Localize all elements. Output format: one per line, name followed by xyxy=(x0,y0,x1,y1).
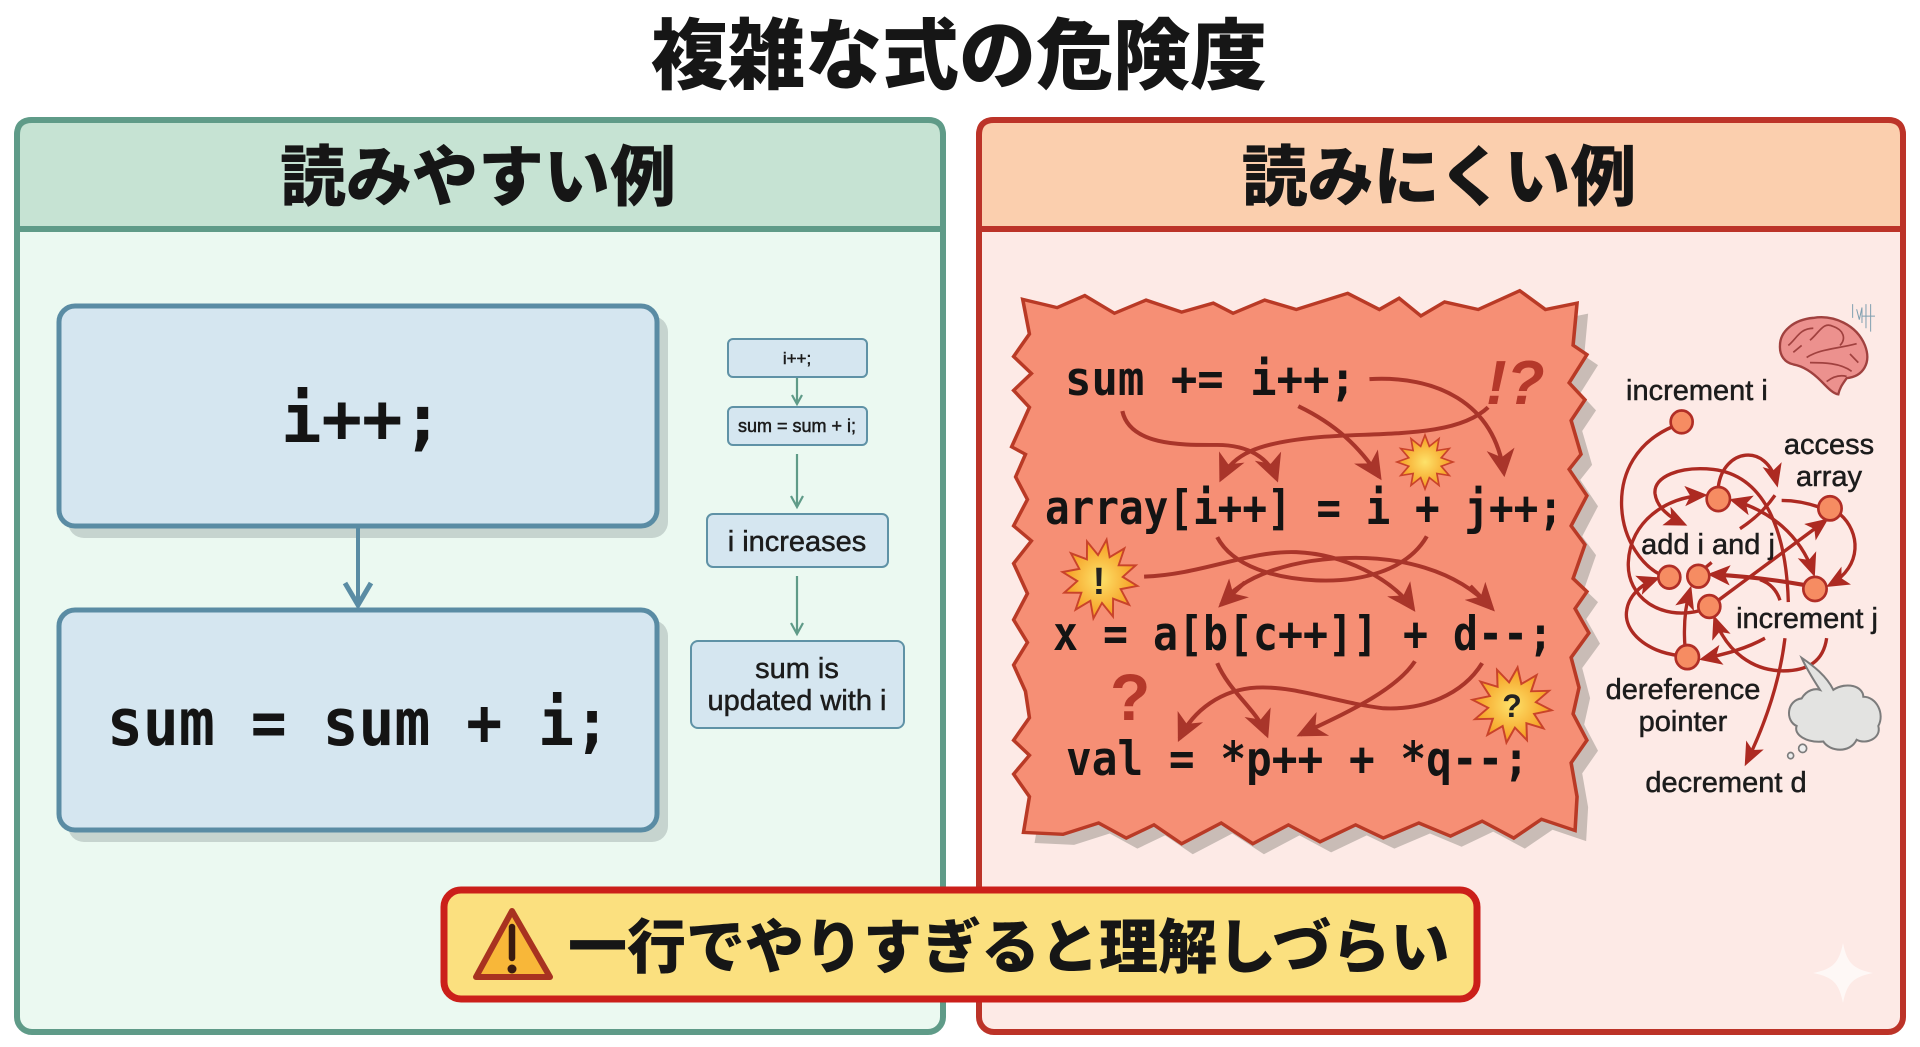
jagged code block xyxy=(1012,291,1600,854)
panel header xyxy=(979,120,1903,229)
icon: burst question: ? xyxy=(1502,688,1522,724)
small box: i increases: i increases xyxy=(728,526,866,558)
small box: sum = sum + i: sum = sum + i; xyxy=(738,416,856,436)
icon: burst exclamation xyxy=(1056,533,1144,625)
icon: burst exclamation: ! xyxy=(1093,561,1105,603)
warning banner xyxy=(444,890,1477,999)
small box: i++ xyxy=(728,339,867,377)
small arrow 2 xyxy=(791,454,803,507)
small flow diagram xyxy=(691,339,904,728)
panel: hard-to-read example xyxy=(979,120,1903,1032)
label: access array xyxy=(1784,429,1874,493)
code line 1: sum += i++; xyxy=(1065,352,1356,407)
code box: i++ xyxy=(59,306,668,538)
icon: brain xyxy=(1780,304,1875,394)
code box: sum xyxy=(59,610,668,842)
label: add i and j: add i and j xyxy=(1641,529,1775,561)
small arrow 1 xyxy=(792,378,802,404)
arrow: big flow xyxy=(345,527,371,605)
decorative sparkle xyxy=(1813,943,1873,1003)
diagram nodes xyxy=(1658,411,1842,669)
code line 4: val = *p++ + *q--; xyxy=(1066,732,1529,787)
diagram arrows xyxy=(1622,426,1855,762)
icon: burst small xyxy=(1397,435,1453,489)
small box: i++: i++; xyxy=(783,349,811,368)
banner text: 一行でやりすぎると理解しづらい xyxy=(568,915,1449,981)
label: dereference pointer: dereference xyxy=(1606,674,1760,706)
code box: i++: i++; xyxy=(281,380,443,459)
label: dereference pointer xyxy=(1606,674,1760,738)
small box: sum is updated with i: updated with i xyxy=(708,685,886,717)
title: 複雑な式の危険度 xyxy=(651,14,1267,100)
label: increment i: increment i xyxy=(1626,375,1768,407)
code line 3: x = a[b[c++]] + d--; xyxy=(1053,607,1553,662)
label: access array: array xyxy=(1796,461,1863,493)
tangled thought diagram xyxy=(1606,304,1881,799)
panel header xyxy=(17,120,943,229)
small box: i increases xyxy=(707,514,888,567)
icon: burst question xyxy=(1467,662,1557,748)
panel header: 読みやすい例 xyxy=(280,140,676,214)
jagged paper xyxy=(1012,291,1600,854)
small box: sum is updated with i: sum is xyxy=(755,653,839,685)
panel background xyxy=(17,120,943,1032)
small box: sum is updated with i xyxy=(691,641,904,728)
panel background xyxy=(979,120,1903,1032)
icon: thought cloud xyxy=(1788,658,1881,759)
code line 2: array[i++] = i + j++; xyxy=(1045,481,1563,536)
label: access array: access xyxy=(1784,429,1874,461)
small box: sum = sum + i xyxy=(728,407,867,445)
tangled arrows xyxy=(1122,379,1504,738)
small arrow 3 xyxy=(791,576,803,634)
label: increment j: increment j xyxy=(1736,603,1878,635)
mark: exclamation question: !? xyxy=(1486,349,1545,418)
panel header: 読みにくい例 xyxy=(1242,140,1636,214)
panel: readable example xyxy=(17,120,943,1032)
mark: question: ? xyxy=(1110,660,1150,734)
code box: sum: sum = sum + i; xyxy=(107,686,610,761)
label: dereference pointer: pointer xyxy=(1639,706,1728,738)
icon: warning triangle xyxy=(476,911,550,977)
label: decrement d: decrement d xyxy=(1645,767,1807,799)
